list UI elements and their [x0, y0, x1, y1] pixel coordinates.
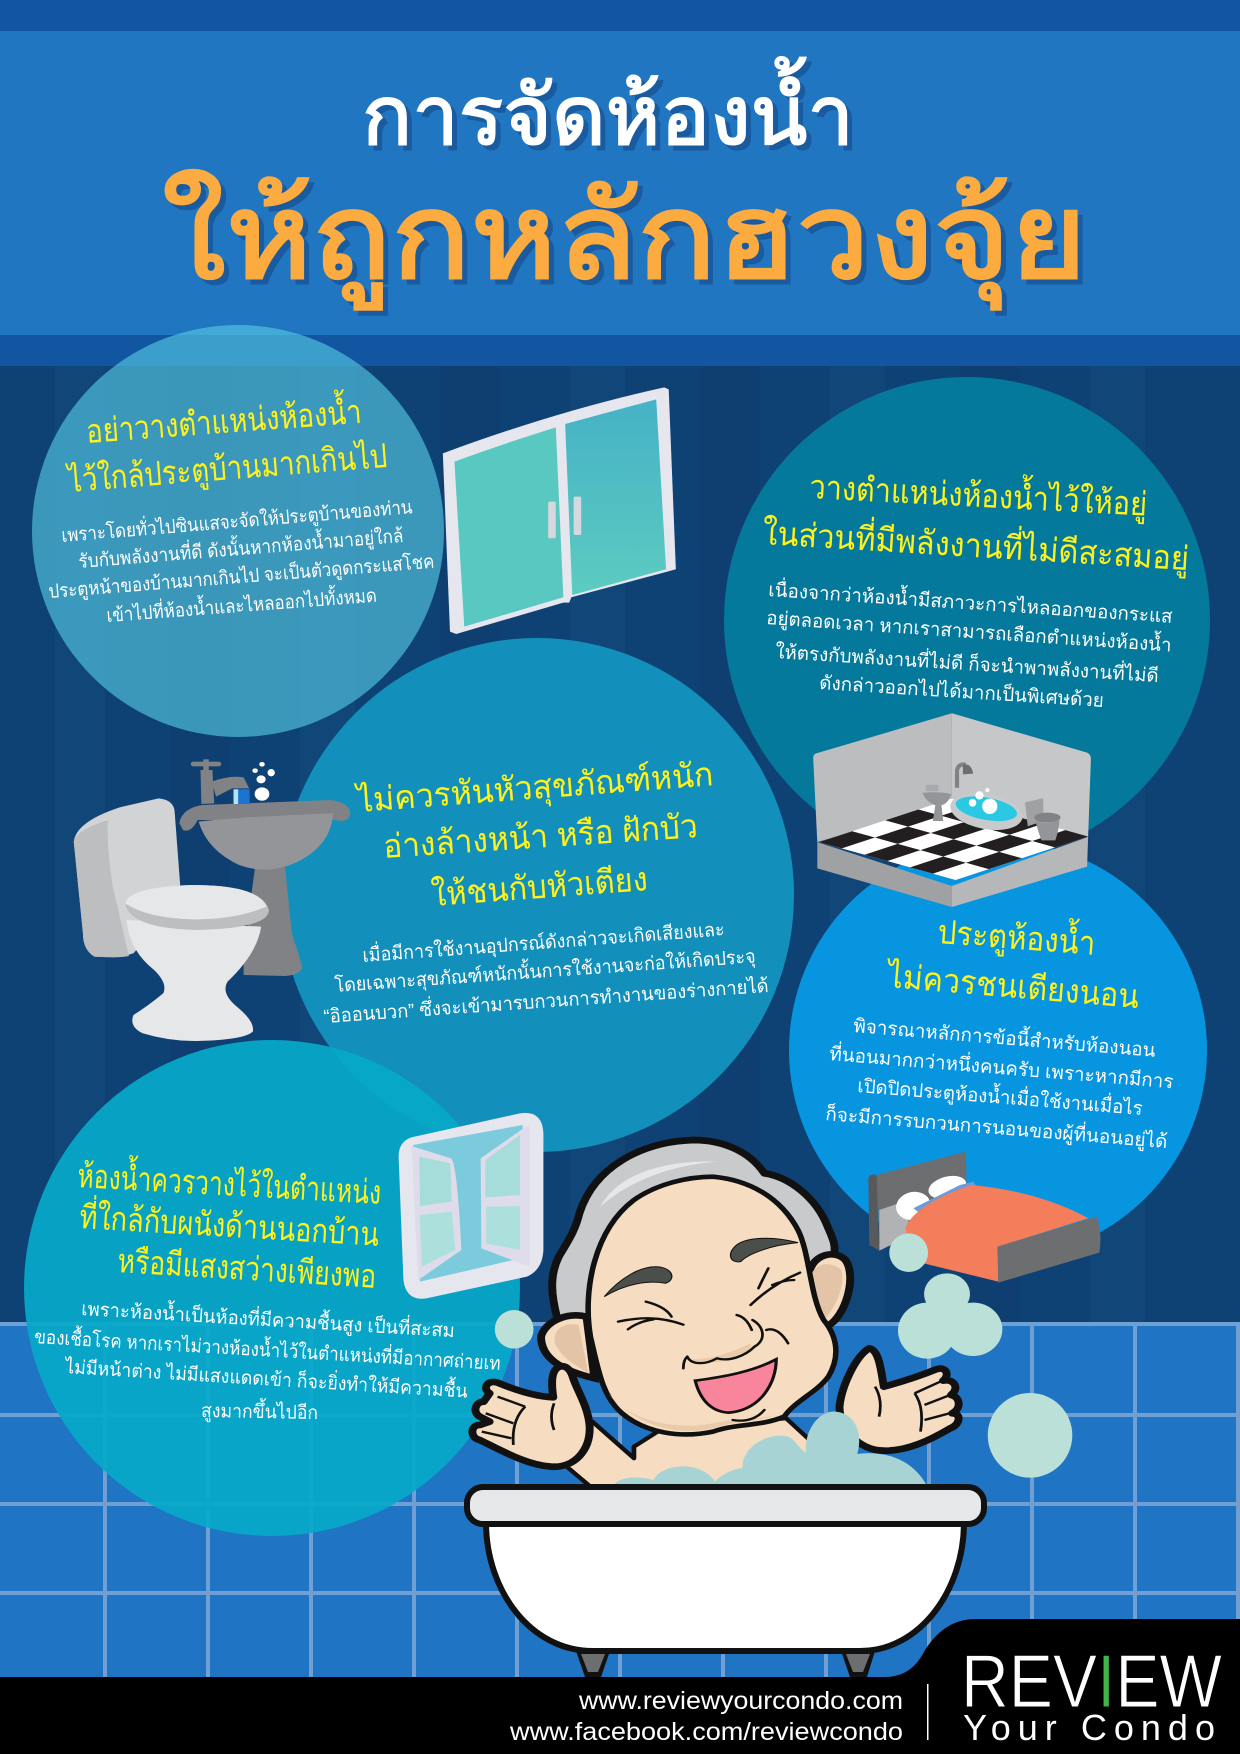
- water: [234, 789, 250, 804]
- arm and chest: [567, 1418, 859, 1487]
- body text: อยู่ตลอดเวลา หากเราสามารถเลือกตำแหน่งห้องน้ำ: [766, 604, 1172, 657]
- body text: เนื่องจากว่าห้องน้ำมีสภาวะการไหลออกของกระแส: [768, 576, 1174, 628]
- left ear: [541, 1315, 594, 1378]
- heading: [64, 388, 389, 501]
- body text: ให้ตรงกับพลังงานที่ไม่ดี ก็จะนำพาพลังงานที่ไม่ดี: [775, 638, 1159, 687]
- body text: [766, 576, 1174, 712]
- title line 2: ให้ถูกหลักฮวงจุ้ย: [162, 170, 1087, 310]
- body text: ดังกล่าวออกไปได้มากเป็นพิเศษด้วย: [819, 670, 1105, 712]
- heading: หรือมีแสงสว่างเพียงพอ: [117, 1242, 377, 1295]
- checkered floor: [819, 799, 1088, 880]
- shower head: [957, 765, 966, 788]
- heading: [77, 1152, 382, 1295]
- body text: ไม่มีหน้าต่าง ไม่มีแสงแดดเข้า ก็จะยิ่งทำให้มีความชื้น: [63, 1353, 468, 1403]
- body text: สูงมากขึ้นไปอีก: [201, 1397, 318, 1424]
- toilet bowl: [127, 920, 261, 1041]
- icon: sink and toilet: [74, 759, 350, 1041]
- heading: ไม่ควรชนเตียงนอน: [884, 957, 1141, 1015]
- left hand: [472, 1366, 590, 1467]
- website links: www.reviewyourcondo.com: [578, 1687, 903, 1715]
- circle background: [280, 638, 794, 1152]
- heading: วางตำแหน่งห้องน้ำไว้ให้อยู่: [809, 463, 1148, 525]
- body text: เพราะห้องน้ำเป็นห้องที่มีความชื้นสูง เป็นที่สะสม: [81, 1295, 456, 1342]
- tub legs: [575, 1648, 611, 1680]
- body text: ก็จะมีการรบกวนการนอนของผู้ที่นอนอยู่ได้: [825, 1100, 1168, 1153]
- bathtub: [467, 1487, 984, 1680]
- icon: open window: [399, 1113, 543, 1299]
- small sink: [923, 792, 951, 821]
- icon: glass door: [443, 387, 676, 634]
- heading: อ่างล้างหน้า หรือ ฝักบัว: [382, 807, 699, 865]
- sink pedestal: [244, 867, 302, 976]
- circle background: [32, 325, 444, 737]
- heading: [353, 755, 715, 913]
- panel: do not point fixtures at bed head: [280, 638, 794, 1152]
- body text: ที่นอนมากกว่าหนึ่งคนครับ เพราะหากมีการ: [829, 1040, 1174, 1093]
- panel: door must not face the bed: [789, 841, 1207, 1259]
- eyes and wrinkles: [618, 1268, 800, 1421]
- body text: [34, 1295, 501, 1424]
- heading: ประตูห้องน้ำ: [936, 908, 1097, 964]
- character: laughing man in bubble bath: [472, 1140, 1072, 1487]
- body text: “อิออนบวก” ซึ่งจะเข้ามารบกวนการทำงานของร่างกายได้: [323, 972, 769, 1028]
- sink counter: [179, 800, 350, 831]
- sink basin: [199, 813, 333, 870]
- body text: รับกับพลังงานที่ดี ดังนั้นหากห้องน้ำมาอยู่ใกล้: [77, 522, 404, 573]
- title line 1: การจัดห้องน้ำ: [362, 57, 854, 162]
- heading: ให้ชนกับหัวเตียง: [430, 860, 649, 913]
- body text: [323, 915, 769, 1028]
- body text: พิจารณาหลักการข้อนี้สำหรับห้องนอน: [853, 1012, 1157, 1062]
- hair: [552, 1140, 835, 1330]
- body text: เพราะโดยทั่วไปซินแสจะจัดให้ประตูบ้านของท่าน: [60, 493, 413, 547]
- heading: [761, 463, 1190, 579]
- circle background: [789, 841, 1207, 1259]
- small bathtub: [947, 788, 1025, 835]
- toilet tank: [74, 798, 180, 957]
- footer divider: [927, 1684, 928, 1740]
- body text: เข้าไปที่ห้องน้ำและไหลออกไปทั้งหมด: [106, 582, 378, 627]
- panel: place in bad-energy area: [724, 377, 1210, 863]
- body text: ประตูหน้าของบ้านมากเกินไป จะเป็นตัวดูดกระแสโชค: [48, 549, 435, 603]
- heading: ที่ใกล้กับผนังด้านนอกบ้าน: [79, 1194, 380, 1253]
- foam: [614, 1412, 926, 1485]
- tub rim: [467, 1487, 984, 1524]
- circle background: [24, 1040, 520, 1536]
- faucet: [200, 770, 214, 804]
- icon: bed: [868, 1152, 1100, 1283]
- right hand: [839, 1348, 959, 1451]
- heading: ห้องน้ำควรวางไว้ในตำแหน่ง: [77, 1152, 382, 1211]
- background: tiled wall: [0, 1322, 1240, 1754]
- circle background: [724, 377, 1210, 863]
- toilet seat: [125, 885, 269, 930]
- body text: โดยเฉพาะสุขภัณฑ์หนักนั้นการใช้งานจะก่อให้เกิดประจุ: [334, 943, 756, 998]
- panel: near outside wall with enough light: [24, 1040, 520, 1536]
- heading: อย่าวางตำแหน่งห้องน้ำ: [84, 388, 363, 450]
- logo: REVIEW: [961, 1639, 1222, 1723]
- logo: Your Condo: [963, 1707, 1215, 1748]
- small toilet: [1025, 798, 1043, 826]
- tub body: [486, 1522, 964, 1651]
- right ear: [810, 1254, 850, 1326]
- heading: ในส่วนที่มีพลังงานที่ไม่ดีสะสมอยู่: [761, 510, 1190, 579]
- footer bar: [0, 1619, 1240, 1754]
- title: [162, 57, 1087, 310]
- water bubbles: [252, 762, 275, 801]
- website links: www.facebook.com/reviewcondo: [509, 1718, 903, 1746]
- body text: [825, 1012, 1174, 1153]
- icon: isometric bathroom: [813, 713, 1091, 907]
- website links: [509, 1687, 903, 1746]
- heading: ไม่ควรหันหัวสุขภัณฑ์หนัก: [353, 755, 715, 821]
- body text: เปิดปิดประตูห้องน้ำเมื่อใช้งานเมื่อไร: [857, 1072, 1144, 1120]
- eyebrows: [604, 1238, 798, 1297]
- body text: ของเชื้อโรค หากเราไม่วางห้องน้ำไว้ในตำแหน่งที่มีอากาศถ่ายเท: [34, 1323, 501, 1375]
- jaw and nose shading: [608, 1343, 782, 1431]
- panel: keep away from front door: [32, 325, 444, 737]
- floating bubbles: [495, 1233, 1072, 1478]
- header banner: [0, 0, 1240, 366]
- mouth: [695, 1359, 776, 1413]
- body text: [48, 493, 435, 627]
- body text: เมื่อมีการใช้งานอุปกรณ์ดังกล่าวจะเกิดเสียงและ: [362, 915, 725, 968]
- heading: [884, 908, 1141, 1015]
- heading: ไว้ใกล้ประตูบ้านมากเกินไป: [64, 437, 389, 501]
- face: [588, 1177, 836, 1434]
